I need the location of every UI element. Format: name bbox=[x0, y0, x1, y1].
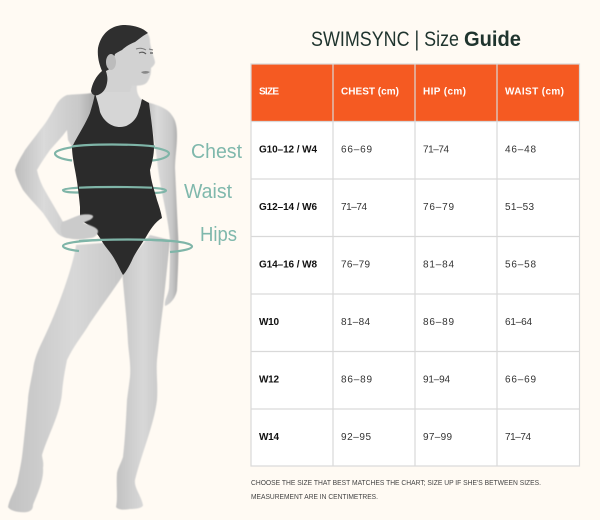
row W12 bbox=[259, 374, 536, 386]
row W10: 81–84 bbox=[341, 317, 370, 328]
row G10-12 / W4: 66–69 bbox=[341, 144, 372, 156]
row G10-12 / W4: G10–12 / W4 bbox=[259, 144, 317, 156]
neck and upper chest skin bbox=[90, 84, 150, 130]
row W10 bbox=[259, 317, 532, 328]
row G14-16 / W8: G14–16 / W8 bbox=[259, 260, 317, 270]
right arm and hand bbox=[146, 102, 178, 306]
model figure with measurement rings bbox=[8, 25, 192, 512]
row G10-12 / W4: 46–48 bbox=[505, 144, 536, 156]
row G10-12 / W4 bbox=[259, 144, 536, 156]
chest ring bbox=[55, 144, 169, 160]
row G12-14 / W6 bbox=[259, 202, 534, 213]
row G12-14 / W6: 51–53 bbox=[505, 202, 534, 213]
table body background bbox=[251, 64, 580, 466]
row G12-14 / W6: 71–74 bbox=[341, 202, 367, 213]
row W12: 91–94 bbox=[423, 374, 450, 386]
row G14-16 / W8 bbox=[259, 260, 536, 270]
swimsuit bbox=[72, 93, 162, 275]
row G14-16 / W8: 81–84 bbox=[423, 260, 454, 270]
table header row: SIZE bbox=[259, 86, 279, 98]
head: hair and ponytail bbox=[91, 25, 148, 95]
row W12: 86–89 bbox=[341, 374, 372, 386]
left arm bbox=[15, 92, 96, 238]
row W12: 66–69 bbox=[505, 374, 536, 386]
row W10: 86–89 bbox=[423, 317, 454, 328]
row W12: W12 bbox=[259, 374, 279, 386]
table header row: WAIST (cm) bbox=[505, 86, 564, 98]
label: waist: Waist bbox=[184, 181, 232, 203]
ear bbox=[106, 54, 116, 70]
table header row bbox=[251, 64, 580, 121]
row G14-16 / W8: 76–79 bbox=[341, 260, 370, 270]
label: hips: Hips bbox=[200, 224, 237, 246]
table header row: CHEST (cm) bbox=[341, 86, 399, 98]
title: SWIMSYNC | Size bbox=[311, 28, 459, 51]
right leg bbox=[116, 235, 170, 510]
row G10-12 / W4: 71–74 bbox=[423, 144, 449, 156]
waist ring front bbox=[79, 186, 152, 189]
chest ring front bbox=[72, 144, 155, 146]
row W14: 92–95 bbox=[341, 432, 371, 443]
footnote: CHOOSE THE SIZE THAT BEST MATCHES THE CHART; SIZE UP IF SHE'S BETWEEN SIZES. bbox=[251, 478, 541, 487]
row G12-14 / W6: G12–14 / W6 bbox=[259, 202, 317, 213]
head: face bbox=[100, 33, 155, 92]
row W14: 71–74 bbox=[505, 432, 531, 443]
footnote bbox=[251, 478, 541, 501]
waist ring bbox=[63, 187, 166, 193]
row G12-14 / W6: 76–79 bbox=[423, 202, 454, 213]
left leg bbox=[8, 240, 140, 512]
label: chest: Chest bbox=[191, 141, 242, 163]
row G14-16 / W8: 56–58 bbox=[505, 260, 536, 270]
row W14 bbox=[259, 432, 531, 443]
row W10: 61–64 bbox=[505, 317, 532, 328]
row W10: W10 bbox=[259, 317, 279, 328]
size table bbox=[251, 64, 580, 466]
row W14: W14 bbox=[259, 432, 279, 443]
hip ring bbox=[63, 240, 192, 252]
footnote: MEASUREMENT ARE IN CENTIMETRES. bbox=[251, 492, 378, 501]
table header row: HIP (cm) bbox=[423, 86, 466, 98]
hand over hip bbox=[61, 214, 98, 239]
face features bbox=[136, 48, 153, 74]
title: Guide bbox=[464, 28, 521, 51]
hip ring front bbox=[79, 240, 170, 241]
row W14: 97–99 bbox=[423, 432, 452, 443]
